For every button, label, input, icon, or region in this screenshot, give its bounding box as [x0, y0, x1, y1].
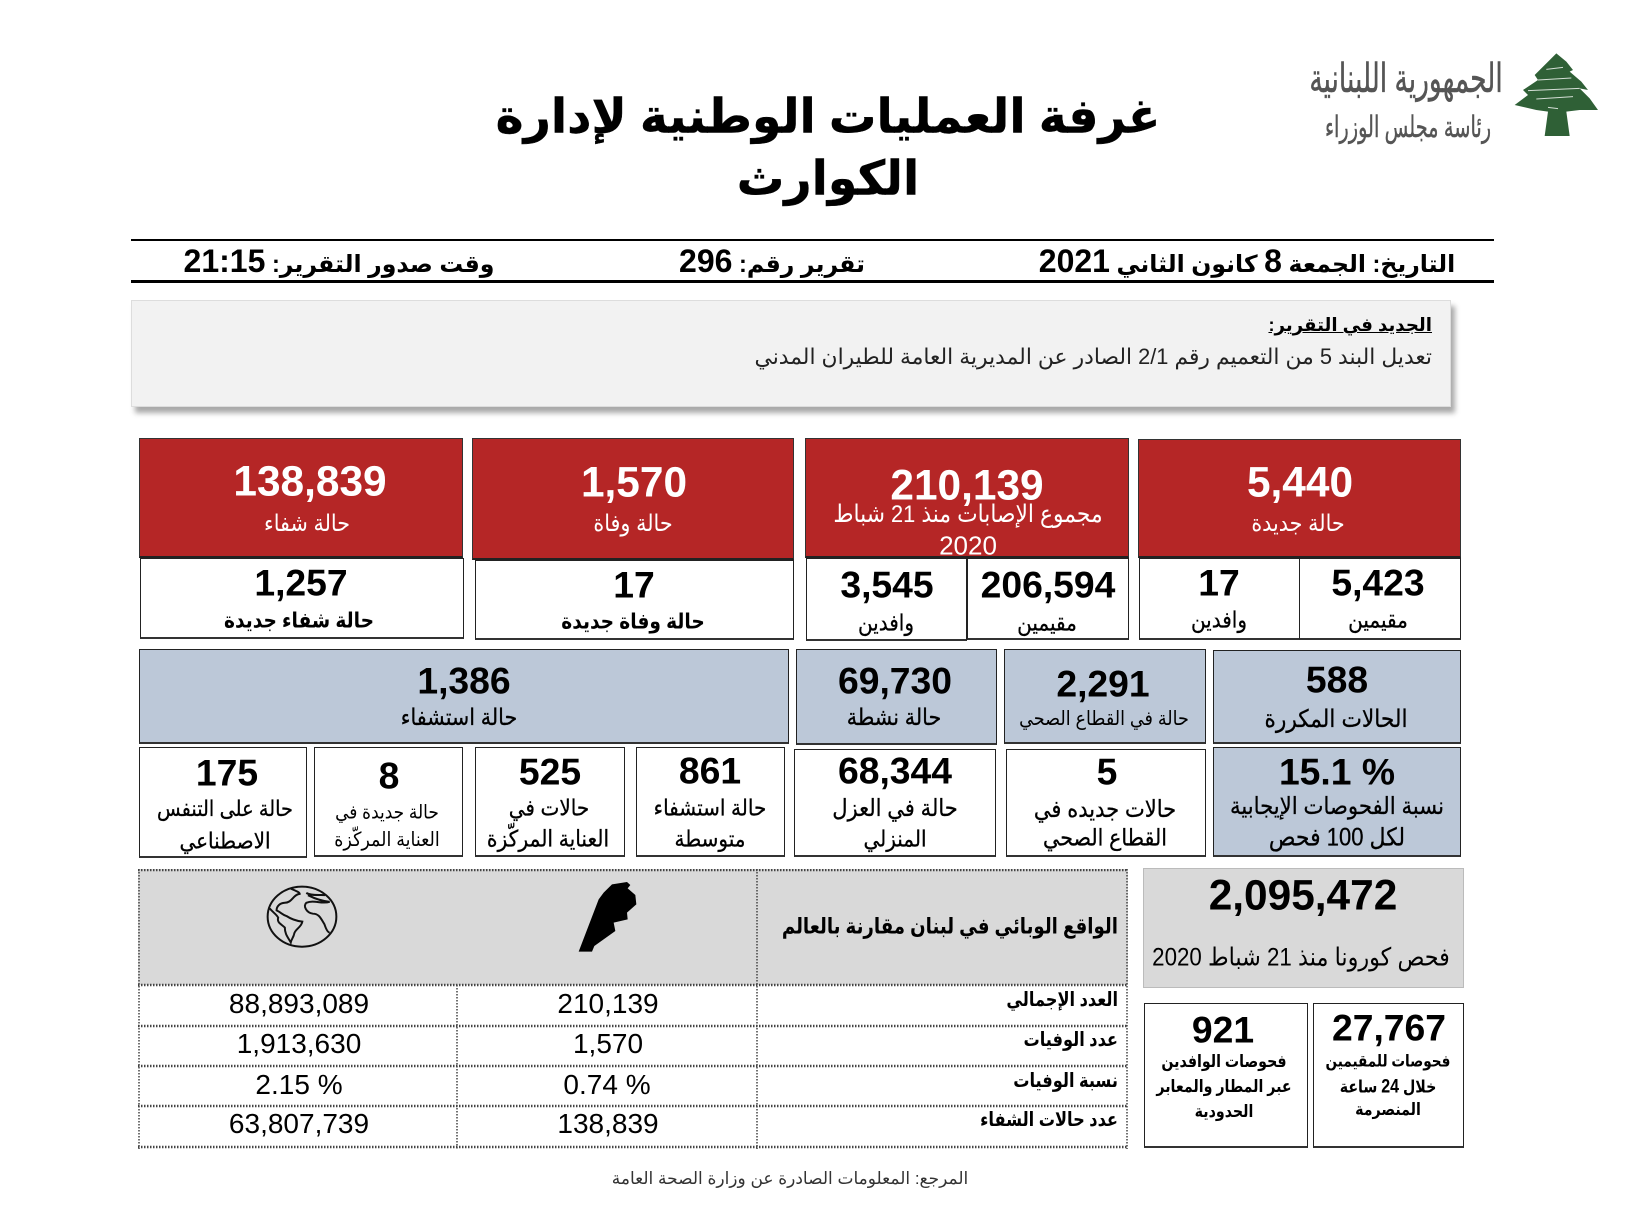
panel: residents tests — [1313, 1003, 1464, 1148]
label line 2: عبر المطار والمعابر — [1156, 1078, 1292, 1097]
label: حالة في القطاع الصحي — [1019, 707, 1189, 730]
label line 2: خلال 24 ساعة — [1340, 1077, 1436, 1097]
value: 175 — [196, 752, 258, 794]
panel: ICU — [475, 747, 625, 857]
value: 5,440 — [1247, 459, 1353, 506]
value: 27,767 — [1332, 1007, 1446, 1049]
label line 3: الحدودية — [1195, 1103, 1253, 1122]
label: وافدين — [858, 612, 914, 636]
value: 525 — [519, 751, 581, 793]
value: 1,570 — [581, 459, 687, 506]
world death rate: 2.15 % — [255, 1069, 343, 1100]
label: وافدين — [1191, 609, 1247, 633]
label year: 2020 — [939, 530, 997, 560]
value: 2,095,472 — [1209, 872, 1397, 919]
panel: ventilated — [139, 747, 307, 858]
label: حالة وفاة جديدة — [561, 609, 705, 633]
label: حالة استشفاء — [654, 797, 766, 821]
table heading: الواقع الوبائي في لبنان مقارنة بالعالم — [782, 914, 1118, 938]
label line 2: العناية المركّزة — [487, 827, 609, 852]
value: 2,291 — [1056, 663, 1150, 705]
label: مقيمين — [1017, 612, 1077, 636]
panel: new cases — [1138, 439, 1461, 558]
Lebanon death rate: 0.74 % — [563, 1069, 651, 1100]
label: حالة استشفاء — [401, 705, 517, 731]
label line 2: المنزلي — [863, 828, 927, 852]
value: 15.1 % — [1279, 751, 1395, 793]
value: 138,839 — [233, 458, 387, 505]
Lebanon recoveries: 138,839 — [557, 1108, 659, 1139]
value: 68,344 — [838, 750, 952, 792]
value: 17 — [613, 564, 655, 606]
value: 8 — [379, 755, 399, 797]
label: حالة شفاء — [264, 511, 350, 537]
label: حالة نشطة — [847, 705, 941, 731]
world deaths: 1,913,630 — [237, 1028, 361, 1059]
report info bar — [131, 239, 1494, 283]
label: حالات في — [509, 797, 589, 821]
panel: new recoveries — [140, 558, 464, 639]
value: 69,730 — [838, 660, 952, 702]
label: حالة على التنفس — [157, 798, 293, 822]
label line 3: المنصرمة — [1355, 1101, 1421, 1120]
panel: total arrivals — [806, 558, 967, 641]
world total: 88,893,089 — [229, 988, 369, 1019]
label: مقيمين — [1348, 609, 1408, 633]
Lebanon deaths: 1,570 — [573, 1028, 643, 1059]
icon: globe — [266, 886, 338, 948]
row label: recoveries: عدد حالات الشفاء — [980, 1109, 1118, 1131]
label: الحالات المكررة — [1264, 704, 1408, 732]
note heading: الجديد في التقرير: — [1268, 315, 1432, 335]
panel: total residents — [967, 558, 1129, 640]
label: فحوصات للمقيمين — [1326, 1052, 1450, 1070]
value: 210,139 — [890, 462, 1044, 509]
value: 5,423 — [1331, 562, 1425, 604]
panel: deaths — [472, 438, 794, 560]
label line 2: لكل 100 فحص — [1269, 823, 1405, 851]
panel: new ICU — [314, 747, 463, 857]
label: مجموع الإصابات منذ 21 شباط — [833, 499, 1103, 527]
value: 1,257 — [254, 562, 348, 604]
panel: repeated cases — [1213, 650, 1461, 744]
value: 5 — [1097, 751, 1117, 793]
panel: positivity — [1213, 747, 1461, 857]
label: حالة في العزل — [832, 796, 958, 822]
label line 2: القطاع الصحي — [1043, 825, 1167, 851]
panel: new deaths — [475, 560, 794, 640]
value: 861 — [679, 750, 741, 792]
logo text: republic: الجمهورية اللبنانية — [1309, 57, 1503, 101]
label: حالات جديده في — [1034, 797, 1176, 823]
value: 588 — [1306, 659, 1368, 701]
row label: deaths: عدد الوفيات — [1023, 1029, 1118, 1051]
panel: total cases — [805, 438, 1129, 558]
label: نسبة الفحوصات الإيجابية — [1230, 794, 1444, 820]
panel: recoveries — [139, 438, 463, 558]
title line 2: الكوارث — [737, 153, 919, 206]
value: 17 — [1198, 562, 1240, 604]
panel: arrivals tests — [1144, 1003, 1308, 1148]
panel: new in report — [131, 300, 1451, 407]
logo: Lebanese Republic cedar and presidency of the council of ministers — [1309, 53, 1598, 144]
value: 921 — [1192, 1009, 1254, 1051]
label: فحوصات الوافدين — [1161, 1053, 1287, 1072]
value: 3,545 — [840, 564, 934, 606]
panel: hospitalised — [139, 649, 789, 744]
note body: تعديل البند 5 من التعميم رقم 2/1 الصادر عن المديرية العامة للطيران المدني — [755, 344, 1432, 369]
label line 2: العناية المركّزة — [334, 828, 440, 851]
panel: health sector — [1004, 649, 1206, 744]
panel: home isolation — [794, 749, 996, 857]
label: حالة جديدة — [1251, 511, 1345, 537]
label: حالة وفاة — [593, 511, 673, 537]
panel: active — [796, 649, 997, 745]
value: 1,386 — [417, 660, 511, 702]
title — [496, 91, 1160, 206]
label: فحص كورونا منذ 21 شباط 2020 — [1152, 943, 1450, 971]
panel: total tests — [1143, 868, 1464, 988]
row label: death rate: نسبة الوفيات — [1013, 1070, 1118, 1092]
label line 2: الاصطناعي — [179, 830, 271, 854]
Lebanon total: 210,139 — [557, 988, 659, 1019]
report number: تقرير رقم: 296 — [679, 243, 865, 279]
panel: new residents — [1299, 558, 1461, 640]
source note: المرجع: المعلومات الصادرة عن وزارة الصحة العامة — [612, 1169, 968, 1188]
label line 2: متوسطة — [675, 828, 745, 852]
table header background — [138, 869, 1128, 985]
icon: Lebanon map — [578, 882, 636, 952]
report time: وقت صدور التقرير: 21:15 — [184, 243, 494, 279]
icon: cedar tree — [1514, 53, 1598, 136]
panel: moderate hospital — [636, 747, 785, 857]
world recoveries: 63,807,739 — [229, 1108, 369, 1139]
table grid — [138, 869, 1128, 1149]
value: 206,594 — [981, 564, 1115, 606]
row label: total: العدد الإجمالي — [1006, 989, 1118, 1011]
date: التاريخ: الجمعة 8 كانون الثاني 2021 — [1039, 243, 1455, 279]
title line 1: غرفة العمليات الوطنية لإدارة — [496, 91, 1160, 144]
label: حالة شفاء جديدة — [224, 608, 374, 632]
panel: new arrivals — [1139, 558, 1300, 640]
logo text: presidency: رئاسة مجلس الوزراء — [1325, 112, 1491, 144]
label: حالة جديدة في — [335, 802, 439, 823]
panel: Lebanon compared with world table — [138, 869, 1128, 1149]
panel: new health sector — [1006, 749, 1206, 857]
